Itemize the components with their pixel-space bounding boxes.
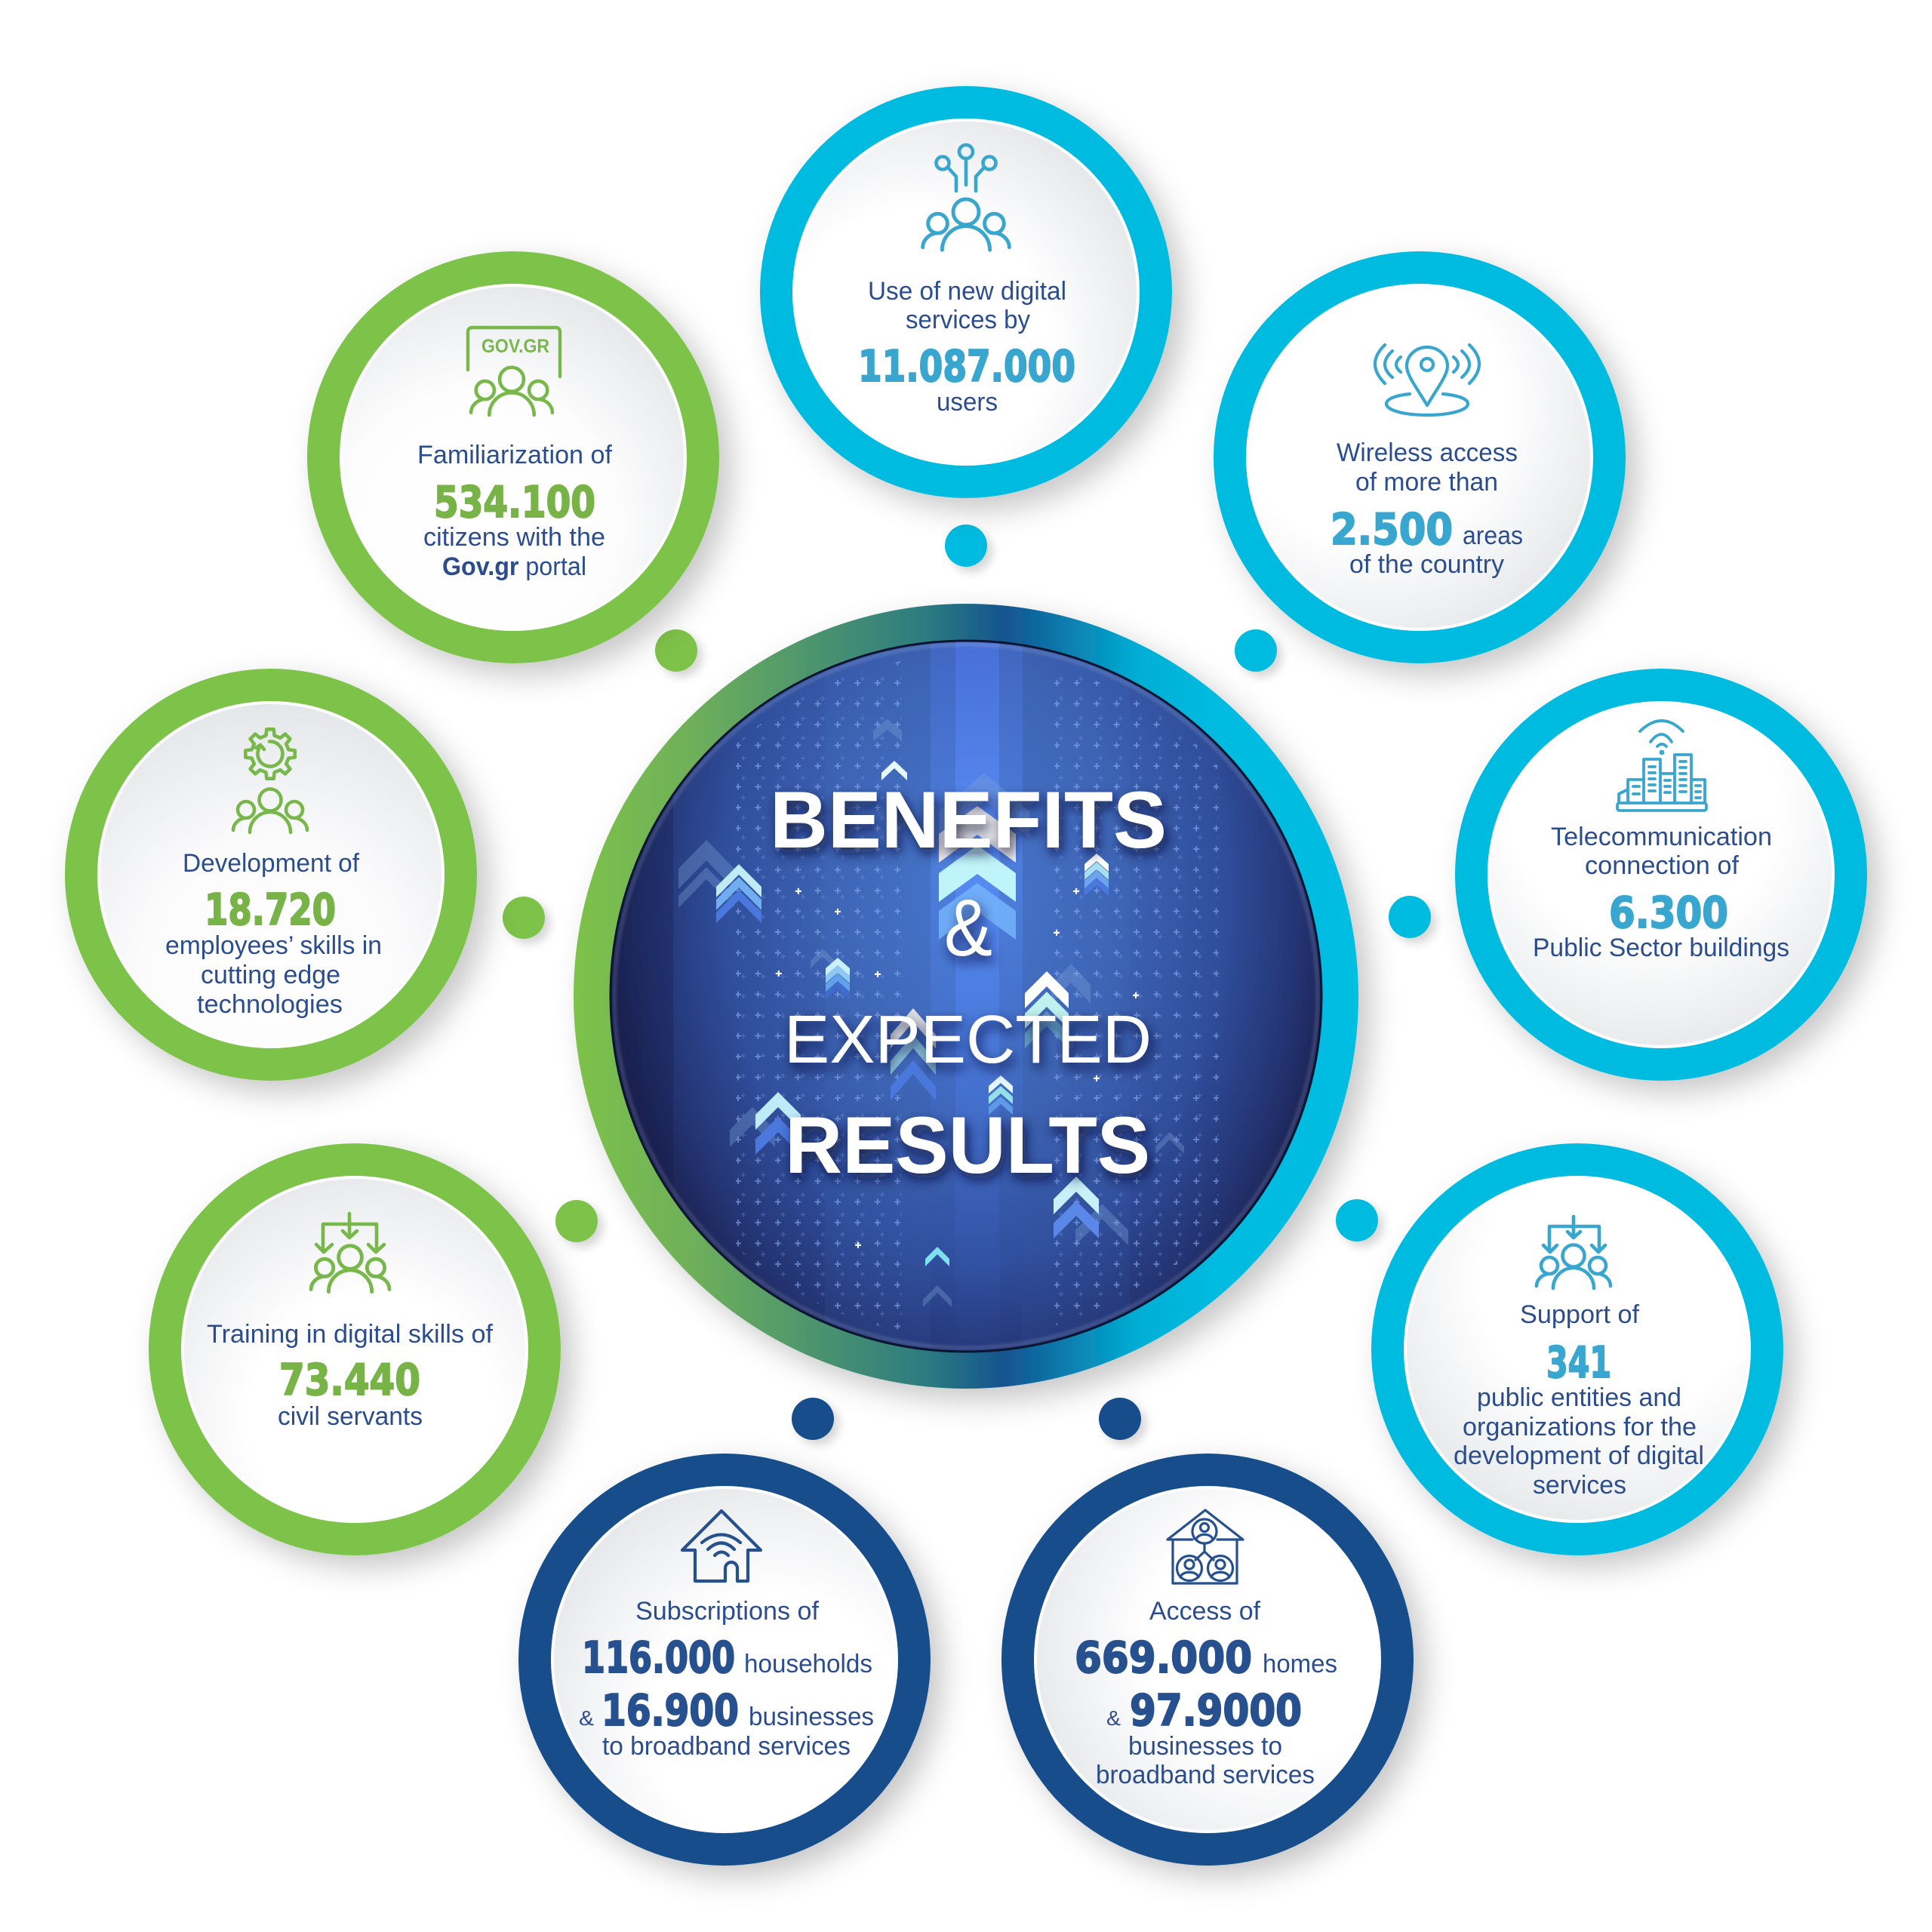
text: training in digital skills: Training in digital skills of bbox=[207, 1320, 494, 1349]
central title: BENEFITS bbox=[770, 774, 1167, 865]
central title bbox=[770, 774, 1167, 1190]
text: subscriptions: households bbox=[744, 1650, 872, 1678]
text: use of digital services: services by bbox=[906, 306, 1030, 334]
text: employee skills development: cutting edge bbox=[201, 961, 340, 989]
text: access of homes: broadband services bbox=[1096, 1761, 1315, 1789]
text: support of public entities: 341 bbox=[1546, 1338, 1611, 1388]
text: wireless access: of the country bbox=[1349, 550, 1504, 579]
central blue disc with chevrons bbox=[611, 641, 1321, 1351]
text: gov.gr familiarization bbox=[417, 441, 613, 581]
icon: location pin with signal bbox=[1375, 345, 1479, 415]
text: support of public entities: services bbox=[1533, 1471, 1626, 1500]
icon: gov.gr screen and people: GOV.GR bbox=[481, 336, 549, 357]
text: wireless access bbox=[1331, 438, 1523, 579]
panel: digital services users bbox=[760, 86, 1172, 498]
text: gov.gr familiarization: citizens with the bbox=[423, 523, 605, 552]
text: access of homes: homes bbox=[1263, 1650, 1337, 1678]
text: use of digital services bbox=[858, 277, 1075, 417]
text: access of homes: 97.9000 bbox=[1130, 1686, 1302, 1736]
text: wireless access: of more than bbox=[1355, 468, 1498, 497]
text: employee skills development bbox=[165, 849, 382, 1019]
text: employee skills development: employees’ skills in bbox=[165, 931, 382, 960]
text: telecommunication connection: connection of bbox=[1585, 851, 1740, 880]
icon: people with arrows bbox=[1537, 1217, 1611, 1288]
panel: access of homes bbox=[1001, 1454, 1414, 1866]
text: gov.gr familiarization: Familiarization of bbox=[417, 441, 613, 469]
central circle: benefits and expected results bbox=[574, 604, 1358, 1389]
text: wireless access: 2.500 bbox=[1331, 505, 1453, 555]
icon: house with wifi bbox=[682, 1511, 761, 1581]
text: subscriptions: to broadband services bbox=[602, 1732, 851, 1761]
text: support of public entities: public entities and bbox=[1477, 1383, 1681, 1412]
text: subscriptions: 16.900 bbox=[601, 1686, 739, 1736]
central gradient ring bbox=[574, 604, 1358, 1389]
text: support of public entities bbox=[1454, 1300, 1704, 1500]
text: telecommunication connection bbox=[1533, 823, 1789, 962]
panel: support of public entities bbox=[1371, 1143, 1783, 1555]
central title: & bbox=[944, 882, 992, 973]
icon: gear and people bbox=[233, 729, 307, 832]
icon: people with arrows bbox=[311, 1214, 389, 1292]
text: telecommunication connection: Telecommunication bbox=[1551, 823, 1772, 851]
text: access of homes: businesses to bbox=[1128, 1732, 1282, 1761]
icon: people with digital network bbox=[923, 145, 1009, 250]
text: support of public entities: development of digital bbox=[1454, 1441, 1704, 1470]
text: training in digital skills: 73.440 bbox=[279, 1355, 420, 1405]
text: support of public entities: organizations for the bbox=[1463, 1413, 1697, 1441]
icon: wifi city buildings bbox=[1617, 721, 1706, 811]
text: use of digital services: users bbox=[937, 388, 998, 417]
text: access of homes: 669.000 bbox=[1075, 1633, 1252, 1683]
text: support of public entities: Support of bbox=[1520, 1300, 1640, 1329]
text: subscriptions: & bbox=[579, 1706, 594, 1730]
text: use of digital services: Use of new digital bbox=[868, 277, 1066, 306]
text: employee skills development: Development of bbox=[183, 849, 360, 878]
panel: subscriptions bbox=[518, 1454, 931, 1866]
text: training in digital skills: civil servants bbox=[278, 1402, 423, 1431]
text: subscriptions bbox=[579, 1597, 874, 1761]
text: subscriptions: 116.000 bbox=[582, 1633, 735, 1683]
panel: telecommunication connection bbox=[1455, 669, 1867, 1081]
text: access of homes bbox=[1075, 1597, 1337, 1789]
connector dots bbox=[503, 525, 1431, 1440]
text: training in digital skills bbox=[207, 1320, 494, 1431]
text: employee skills development: 18.720 bbox=[205, 885, 336, 935]
panel: wireless access bbox=[1214, 251, 1626, 663]
text: telecommunication connection: Public Sector buildings bbox=[1533, 934, 1789, 962]
text: wireless access: Wireless access bbox=[1337, 438, 1518, 467]
text: access of homes: Access of bbox=[1149, 1597, 1261, 1626]
central title: RESULTS bbox=[785, 1100, 1150, 1190]
text: gov.gr familiarization: 534.100 bbox=[434, 478, 595, 528]
text: gov.gr familiarization: Gov.gr portal bbox=[442, 552, 586, 581]
text: subscriptions: Subscriptions of bbox=[635, 1597, 820, 1626]
text: access of homes: & bbox=[1106, 1706, 1121, 1730]
icon: gov.gr screen and people bbox=[468, 328, 560, 415]
icon: house with connected people bbox=[1168, 1510, 1243, 1583]
central title: EXPECTED bbox=[784, 1002, 1152, 1078]
chevron stacks bbox=[716, 761, 1109, 1266]
panel: gov.gr familiarization bbox=[307, 251, 719, 663]
text: wireless access: areas bbox=[1463, 521, 1523, 550]
text: use of digital services: 11.087.000 bbox=[858, 342, 1075, 392]
text: telecommunication connection: 6.300 bbox=[1609, 888, 1728, 938]
text: subscriptions: businesses bbox=[749, 1703, 874, 1731]
panel: training in digital skills bbox=[149, 1143, 561, 1555]
text: employee skills development: technologies bbox=[197, 990, 343, 1019]
panel: employee skills development bbox=[65, 669, 477, 1081]
